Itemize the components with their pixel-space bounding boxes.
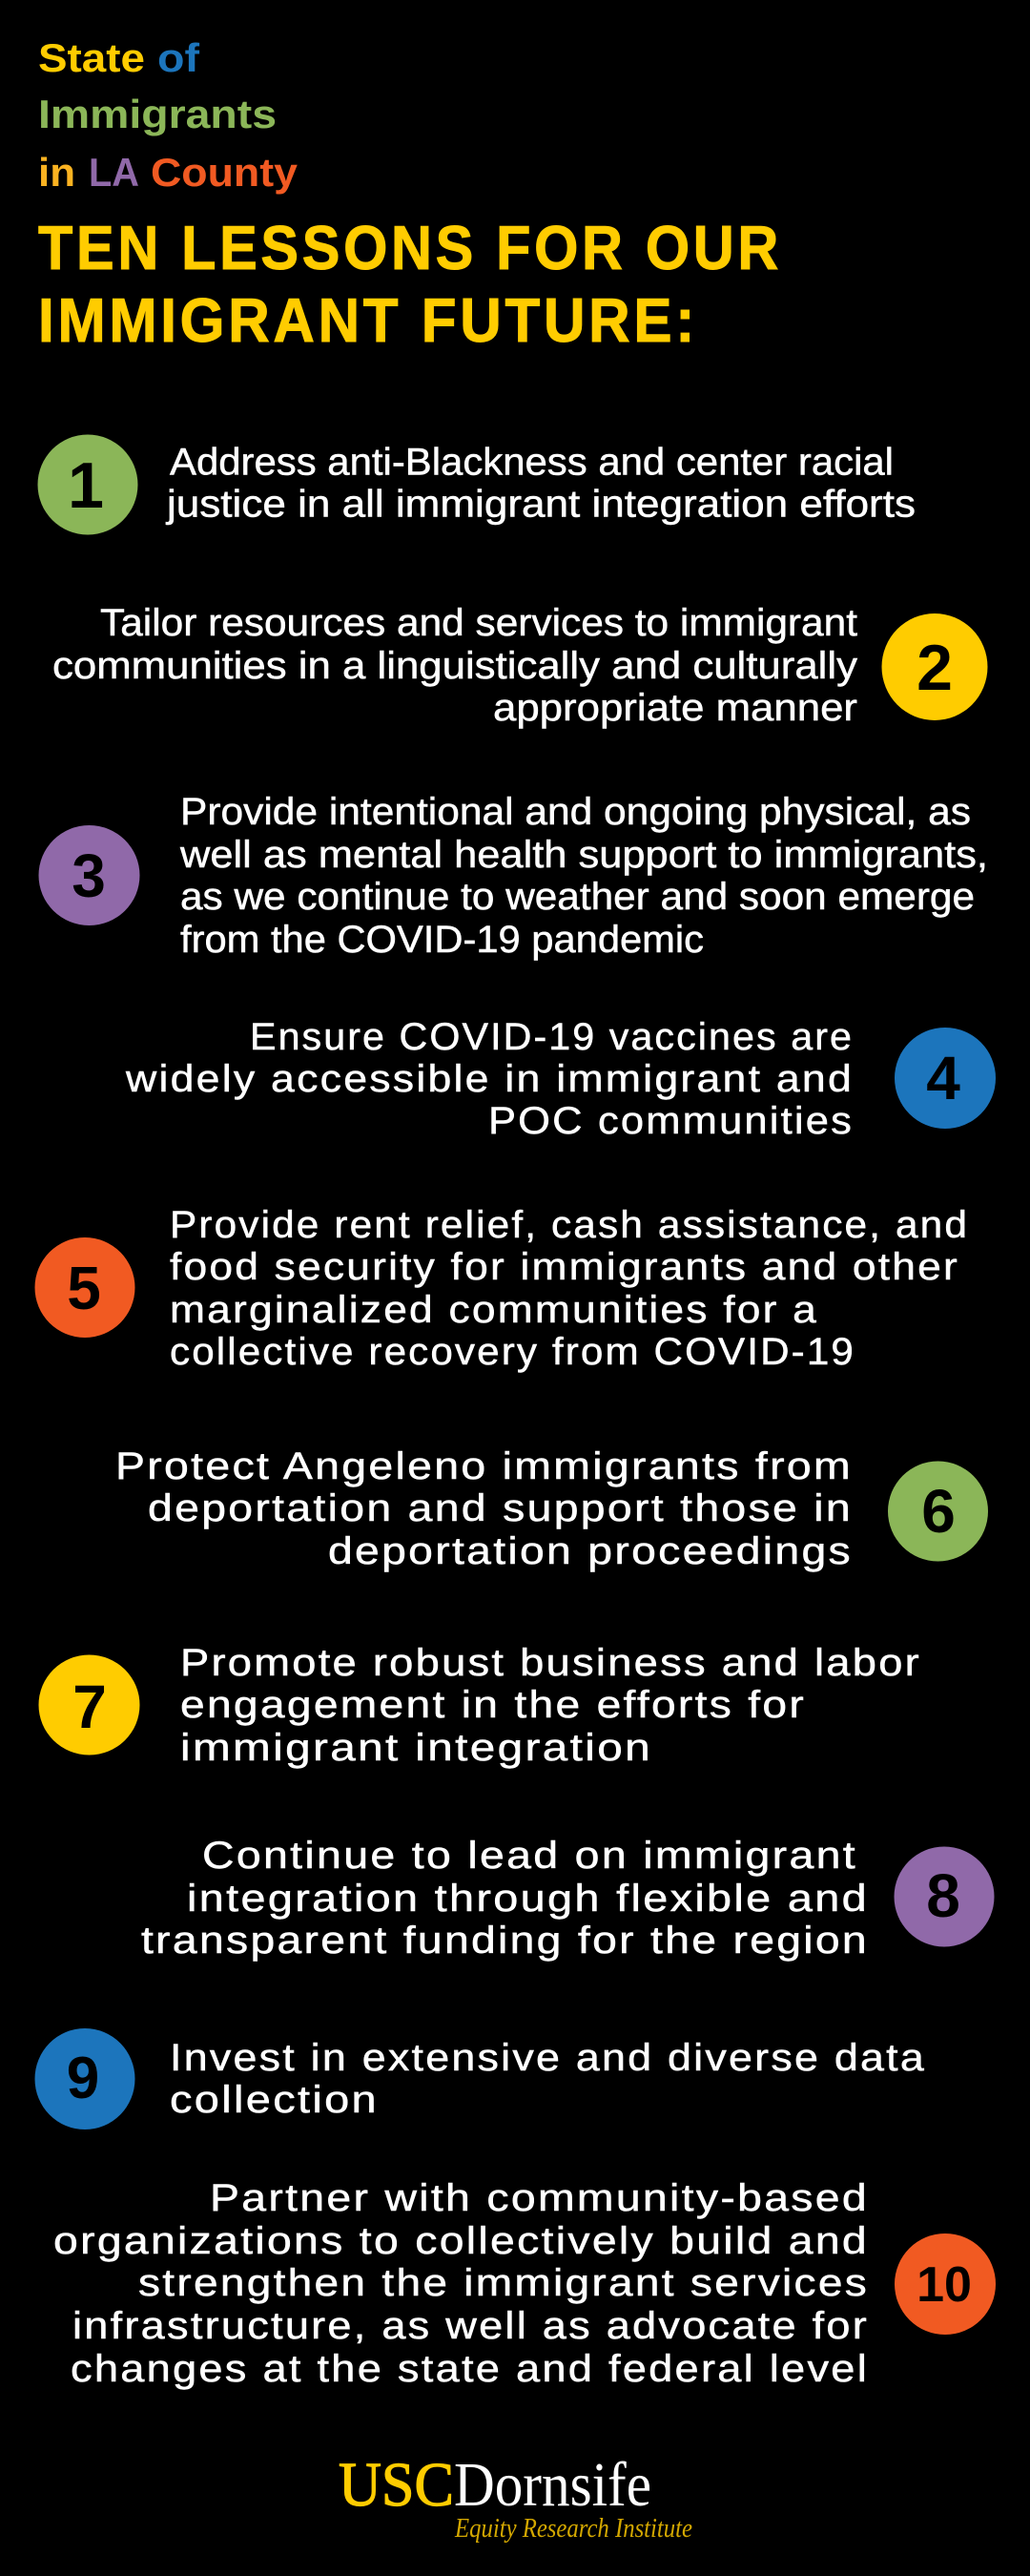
lesson 9 text: collection <box>170 2079 379 2121</box>
badge 2: 2 <box>917 632 953 704</box>
lesson 2 text: appropriate manner <box>493 687 857 729</box>
logo: USC Dornsife Equity Research Institute: Equity Research Institute <box>454 2514 692 2544</box>
lesson 8 <box>141 1835 994 1962</box>
report name: of <box>157 35 200 80</box>
lesson 1 <box>38 435 916 534</box>
title <box>38 213 782 355</box>
lesson 7 text: immigrant integration <box>180 1727 652 1769</box>
badge 5 <box>34 1237 135 1338</box>
badge 5: 5 <box>67 1254 101 1322</box>
badge 3: 3 <box>72 841 106 910</box>
lesson 8 text: Continue to lead on immigrant <box>202 1835 857 1877</box>
badge 1 <box>38 435 137 534</box>
report name: State <box>38 35 145 80</box>
lesson 4 text <box>125 1016 854 1142</box>
lesson 10 text: changes at the state and federal level <box>71 2348 869 2390</box>
lesson 8 text: integration through flexible and <box>187 1878 869 1920</box>
lesson 2 text: Tailor resources and services to immigrant <box>100 602 857 644</box>
lesson 2 <box>52 602 988 729</box>
badge 8: 8 <box>926 1861 960 1930</box>
lesson 2 text <box>52 602 857 729</box>
lesson 4 <box>125 1016 996 1142</box>
lesson 6 text: Protect Angeleno immigrants from <box>115 1445 853 1487</box>
lesson 8 text <box>141 1835 869 1962</box>
lesson 3 text: as we continue to weather and soon emerge <box>180 876 975 918</box>
lesson 10 text: strengthen the immigrant services <box>138 2262 869 2304</box>
badge 9 <box>34 2028 135 2129</box>
lesson 3 <box>38 791 988 961</box>
lesson 3 text <box>179 791 988 961</box>
badge 6: 6 <box>921 1477 956 1546</box>
badge 10 <box>895 2233 996 2335</box>
lesson 1 text <box>166 441 916 525</box>
lesson 5 text: Provide rent relief, cash assistance, and <box>170 1204 969 1246</box>
title: IMMIGRANT FUTURE: <box>38 285 698 355</box>
lesson 3 text: from the COVID-19 pandemic <box>180 919 704 961</box>
lesson 3 text: Provide intentional and ongoing physical, as <box>180 791 971 833</box>
lesson 10 text: organizations to collectively build and <box>53 2220 869 2262</box>
lesson 5 text <box>170 1204 969 1373</box>
lesson 5 text: marginalized communities for a <box>170 1289 818 1331</box>
lesson 4 text: widely accessible in immigrant and <box>125 1058 854 1100</box>
lesson 9 <box>34 2028 926 2129</box>
report name: Immigrants <box>38 92 277 136</box>
lesson 7 text <box>180 1642 921 1769</box>
report name: in <box>38 150 75 195</box>
lesson 6 text: deportation and support those in <box>148 1487 853 1529</box>
lesson 7 text: engagement in the efforts for <box>180 1684 806 1726</box>
badge 6 <box>888 1462 988 1561</box>
lesson 4 text: POC communities <box>488 1100 854 1142</box>
logo: USC Dornsife Equity Research Institute <box>339 2450 692 2544</box>
lesson 4 text: Ensure COVID-19 vaccines are <box>250 1016 854 1058</box>
lesson 2 text: communities in a linguistically and culturally <box>52 645 857 687</box>
badge 7: 7 <box>72 1672 107 1741</box>
badge 4 <box>895 1028 996 1129</box>
logo: USC Dornsife Equity Research Institute: USC <box>339 2450 454 2520</box>
lesson 5 <box>34 1204 969 1373</box>
lesson 7 text: Promote robust business and labor <box>180 1642 921 1684</box>
logo: USC Dornsife Equity Research Institute: Dornsife <box>454 2450 651 2520</box>
lesson 10 <box>53 2177 996 2390</box>
lesson 6 text: deportation proceedings <box>328 1530 853 1572</box>
lesson 5 text: collective recovery from COVID-19 <box>170 1331 855 1373</box>
lesson 1 text: Address anti-Blackness and center racial <box>170 441 894 483</box>
lesson 9 text: Invest in extensive and diverse data <box>170 2037 926 2079</box>
lesson 3 text: well as mental health support to immigrants, <box>179 834 988 876</box>
lesson 5 text: food security for immigrants and other <box>170 1246 959 1288</box>
lesson 9 text <box>170 2037 926 2121</box>
report name: County <box>151 150 299 195</box>
badge 4: 4 <box>926 1044 960 1112</box>
lesson 10 text: Partner with community-based <box>210 2177 869 2219</box>
title: TEN LESSONS FOR OUR <box>38 213 782 282</box>
badge 8 <box>895 1847 994 1946</box>
report name: LA <box>89 150 139 195</box>
badge 2 <box>881 613 988 720</box>
lesson 10 text <box>53 2177 869 2390</box>
lesson 7 <box>38 1642 921 1769</box>
lesson 8 text: transparent funding for the region <box>141 1920 869 1962</box>
badge 10: 10 <box>917 2257 972 2313</box>
badge 3 <box>38 825 139 925</box>
report name <box>38 35 299 195</box>
lesson 6 <box>115 1445 988 1572</box>
badge 7 <box>38 1654 139 1755</box>
badge 9: 9 <box>67 2046 99 2111</box>
lesson 6 text <box>115 1445 853 1572</box>
lesson 10 text: infrastructure, as well as advocate for <box>72 2305 869 2347</box>
badge 1: 1 <box>68 449 104 522</box>
lesson 1 text: justice in all immigrant integration efforts <box>166 483 916 525</box>
